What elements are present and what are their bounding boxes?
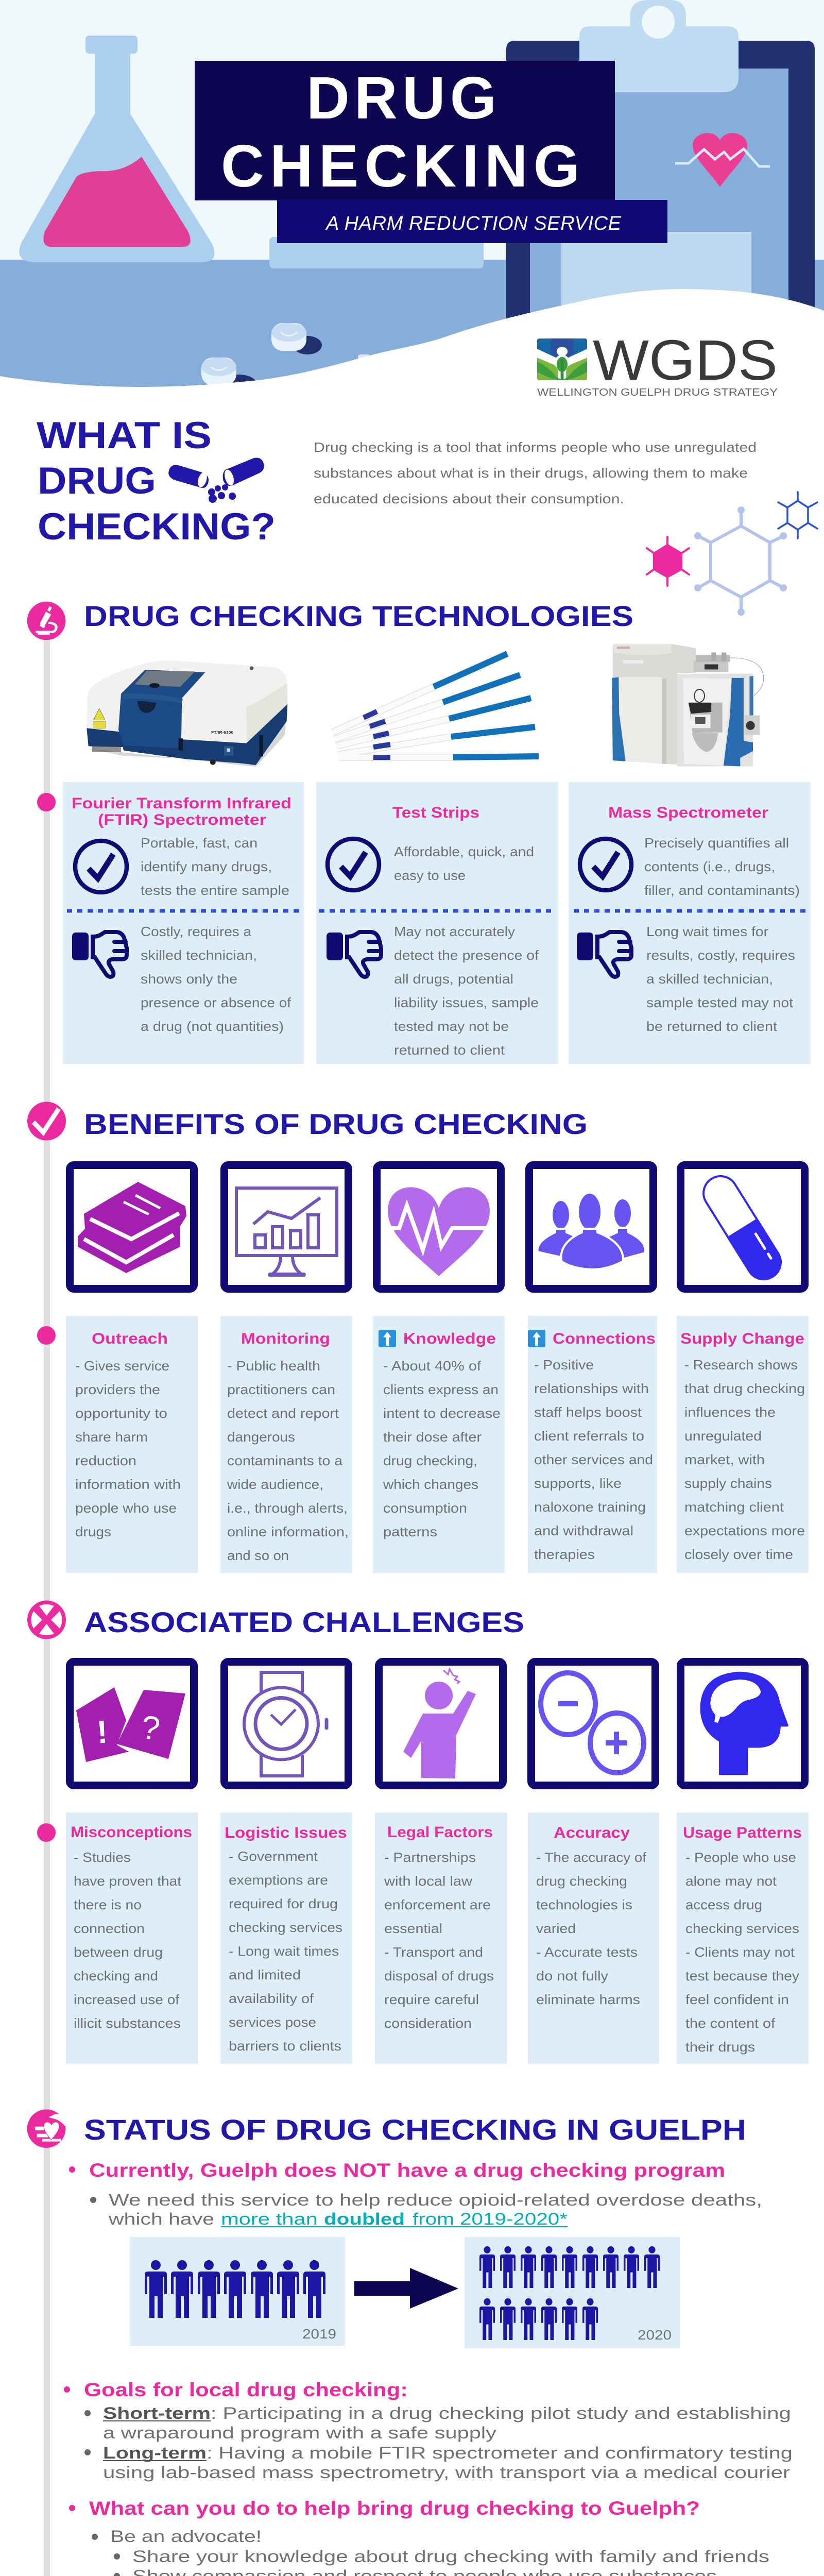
icon frame: misconceptions [70, 1662, 194, 1786]
pictogram: deaths 2019 [130, 2237, 345, 2346]
icon: microscope [27, 602, 65, 640]
text block: how to help [69, 2498, 778, 2576]
panel: usage patterns: access drug [685, 1897, 762, 1912]
panel: logistic issues: - Government [229, 1849, 318, 1864]
panel: misconceptions: between drug [74, 1944, 163, 1960]
panel: logistic issues: required for drug [229, 1896, 338, 1911]
intro paragraph [314, 439, 757, 506]
text block: goals: Long-term [103, 2444, 207, 2462]
panel: connections: supports, like [534, 1476, 622, 1491]
title banner: DRUG [306, 64, 496, 131]
pictogram: deaths 2020: 2020 [638, 2327, 672, 2343]
text block: current status: more than [221, 2210, 318, 2228]
panel: supply change: unregulated [684, 1428, 762, 1444]
section heading: benefits [27, 1101, 588, 1141]
panel: knowledge [373, 1316, 505, 1573]
text block: how to help: What can you do to help bring drug checking to Guelph? [89, 2498, 700, 2519]
panel: usage patterns: alone may not [685, 1873, 777, 1889]
panel: knowledge: consumption [383, 1500, 467, 1516]
panel: supply change [677, 1316, 809, 1573]
panel: outreach: reduction [75, 1453, 136, 1468]
marker dot [37, 1823, 56, 1842]
panel: outreach: people who use [75, 1500, 177, 1516]
panel: accuracy: - Accurate tests [536, 1944, 638, 1960]
panel: outreach: Outreach [92, 1330, 168, 1347]
panel: usage patterns: test because they [685, 1968, 799, 1984]
panel: accuracy: Accuracy [554, 1824, 630, 1841]
panel: monitoring: wide audience, [227, 1477, 323, 1492]
panel: mass spectrometer: filler, and contaminants) [644, 883, 800, 898]
panel: connections: naloxone training [534, 1499, 646, 1515]
panel: FTIR spectrometer: a drug (not quantities) [141, 1019, 284, 1034]
panel: knowledge: drug checking, [383, 1453, 477, 1468]
icon: bottle base [269, 237, 484, 268]
text block: goals: a wraparound program with a safe supply [103, 2424, 496, 2442]
panel: monitoring: contaminants to a [227, 1453, 343, 1468]
panel: supply change: influences the [684, 1404, 776, 1420]
marker dot [37, 793, 56, 811]
panel: outreach: information with [75, 1477, 181, 1492]
section heading: status in Guelph [27, 2109, 746, 2148]
panel: outreach: opportunity to [75, 1405, 167, 1421]
panel: logistic issues: barriers to clients [229, 2038, 341, 2054]
panel: supply change: supply chains [684, 1476, 772, 1491]
panel: logistic issues: checking services [229, 1920, 342, 1935]
panel: mass spectrometer: Mass Spectrometer [608, 804, 768, 821]
text block: current status: which have [108, 2210, 214, 2228]
panel: mass spectrometer: results, costly, requires [646, 947, 795, 963]
panel: FTIR spectrometer: tests the entire sample [141, 883, 289, 898]
text block: goals: : Having a mobile FTIR spectrometer and confirmatory testing [207, 2444, 793, 2462]
panel: test strips: all drugs, potential [394, 971, 513, 987]
panel: monitoring: - Public health [227, 1358, 320, 1374]
hero illustration [0, 0, 824, 417]
text block: how to help: Share your knowledge about drug checking with family and friends [132, 2547, 769, 2566]
panel: logistic issues: exemptions are [229, 1872, 328, 1888]
heading: what is drug checking: DRUG [38, 460, 156, 502]
panel: FTIR spectrometer: Costly, requires a [141, 924, 252, 939]
logo: WGDS: WGDS [593, 329, 778, 392]
panel: test strips: May not accurately [394, 924, 515, 939]
panel: test strips: tested may not be [394, 1019, 509, 1034]
panel: logistic issues: availability of [229, 1991, 314, 2006]
arrow [354, 2268, 458, 2309]
icon frame: heart [377, 1165, 501, 1289]
title banner: CHECKING [221, 132, 580, 199]
text block: current status [69, 2160, 762, 2228]
white wave [0, 289, 824, 417]
panel: knowledge: Knowledge [403, 1330, 496, 1347]
pictogram: deaths 2019: 2019 [302, 2326, 336, 2342]
panel: legal factors: with local law [384, 1873, 472, 1889]
logo: WGDS [537, 329, 778, 398]
icon frame: legal factors [379, 1662, 503, 1786]
panel: supply change: matching client [684, 1499, 784, 1515]
panel: accuracy: do not fully [536, 1968, 608, 1984]
panel: supply change: Supply Change [680, 1330, 804, 1347]
icon frame: capsule [681, 1165, 804, 1289]
panel: logistic issues [220, 1812, 352, 2064]
panel: logistic issues: services pose [229, 2014, 316, 2030]
text block: current status: We need this service to help reduce opioid-related overdose deaths, [109, 2191, 762, 2209]
text block: goals [64, 2379, 793, 2482]
logo: WGDS: WELLINGTON GUELPH DRUG STRATEGY [537, 387, 778, 398]
panel: misconceptions: connection [74, 1921, 145, 1936]
panel: FTIR spectrometer: shows only the [141, 971, 237, 987]
icon: molecules [647, 492, 817, 614]
panel: supply change: market, with [684, 1452, 765, 1467]
panel: connections: - Positive [534, 1357, 594, 1372]
panel: outreach [66, 1316, 198, 1573]
panel: misconceptions: Misconceptions [71, 1824, 192, 1841]
image: FTIR spectrometer [87, 660, 287, 767]
panel: test strips: returned to client [394, 1042, 505, 1058]
panel: knowledge: intent to decrease [383, 1405, 501, 1421]
panel: misconceptions [66, 1812, 198, 2064]
panel: mass spectrometer [569, 782, 811, 1064]
text block: current status: Currently, Guelph does NOT have a drug checking program [89, 2160, 725, 2181]
heading: what is drug checking [37, 415, 276, 548]
panel: usage patterns: their drugs [685, 2039, 755, 2055]
panel: outreach: drugs [75, 1524, 111, 1539]
panel: usage patterns: the content of [685, 2015, 776, 2031]
text block: goals: Short-term [103, 2404, 211, 2422]
panel: accuracy [528, 1812, 659, 2064]
panel: misconceptions: there is no [74, 1897, 142, 1912]
panel: monitoring: and so on [227, 1548, 289, 1563]
heading: what is drug checking: WHAT IS [37, 415, 212, 456]
panel: accuracy: - The accuracy of [536, 1850, 647, 1865]
panel: FTIR spectrometer: presence or absence of [141, 995, 291, 1010]
icon: heart in hand [27, 2109, 65, 2148]
pictogram: deaths 2020 [465, 2237, 680, 2348]
panel: usage patterns: Usage Patterns [683, 1824, 802, 1841]
icon: check badge [27, 1101, 66, 1141]
panel: misconceptions: - Studies [74, 1850, 131, 1865]
panel: accuracy: drug checking [536, 1873, 627, 1889]
panel: usage patterns: - Clients may not [685, 1944, 795, 1960]
icon frame: people [529, 1165, 653, 1289]
panel: connections: staff helps boost [534, 1404, 642, 1420]
panel: misconceptions: have proven that [74, 1873, 182, 1889]
panel: mass spectrometer: Precisely quantifies all [644, 835, 789, 851]
panel: supply change: expectations more [684, 1523, 805, 1538]
panel: supply change: closely over time [684, 1547, 793, 1562]
panel: connections: client referrals to [534, 1428, 644, 1444]
icon frame: head [681, 1662, 804, 1786]
timeline line [44, 639, 50, 2576]
panel: monitoring: online information, [227, 1524, 349, 1539]
panel: legal factors: - Transport and [384, 1944, 483, 1960]
panel: logistic issues: Logistic Issues [225, 1824, 347, 1841]
panel: misconceptions: increased use of [74, 1992, 180, 2007]
panel: connections: and withdrawal [534, 1523, 633, 1538]
panel: connections [528, 1316, 657, 1573]
icon frame: books [70, 1165, 194, 1289]
panel: misconceptions: checking and [74, 1968, 158, 1984]
icon: clipboard [506, 0, 815, 376]
panel: legal factors: disposal of drugs [384, 1968, 494, 1984]
panel: knowledge: - About 40% of [383, 1358, 482, 1374]
panel: logistic issues: and limited [229, 1967, 301, 1982]
panel: test strips: detect the presence of [394, 947, 539, 963]
section heading: status in Guelph: STATUS OF DRUG CHECKING IN GUELPH [84, 2113, 746, 2146]
panel: legal factors: consideration [384, 2015, 472, 2031]
panel: legal factors: enforcement are [384, 1897, 491, 1912]
intro paragraph: substances about what is in their drugs, allowing them to make [314, 465, 748, 481]
text block: goals: using lab-based mass spectrometry, with transport via a medical courier [103, 2463, 790, 2482]
panel: outreach: providers the [75, 1382, 160, 1397]
intro paragraph: Drug checking is a tool that informs people who use unregulated [314, 439, 757, 455]
panel: usage patterns [677, 1812, 809, 2064]
image: mass spectrometer [612, 644, 764, 767]
panel: supply change: - Research shows [684, 1357, 798, 1372]
panel: legal factors: require careful [384, 1992, 479, 2007]
icon: heartbeat heart [675, 133, 770, 187]
panel: knowledge: which changes [383, 1477, 478, 1492]
panel: accuracy: eliminate harms [536, 1992, 640, 2007]
title banner [195, 61, 615, 200]
panel: knowledge: clients express an [383, 1382, 499, 1397]
panel: monitoring: dangerous [227, 1429, 295, 1445]
panel: mass spectrometer: Long wait times for [646, 924, 768, 939]
panel: monitoring: i.e., through alerts, [227, 1500, 348, 1516]
panel: monitoring: practitioners can [227, 1382, 335, 1397]
panel: usage patterns: checking services [685, 1921, 799, 1936]
panel: monitoring: Monitoring [241, 1330, 330, 1347]
panel: usage patterns: - People who use [685, 1850, 796, 1865]
icon: opening capsule [168, 457, 264, 503]
panel: accuracy: technologies is [536, 1897, 632, 1912]
panel: supply change: that drug checking [684, 1381, 805, 1396]
panel: FTIR spectrometer: skilled technician, [141, 947, 257, 963]
panel: knowledge: patterns [383, 1524, 437, 1539]
panel: usage patterns: feel confident in [685, 1992, 789, 2007]
panel: connections: relationships with [534, 1381, 649, 1396]
panel: mass spectrometer: be returned to client [646, 1019, 778, 1034]
panel: mass spectrometer: contents (i.e., drugs, [644, 859, 775, 874]
section heading: technologies [27, 600, 633, 640]
panel: monitoring [220, 1316, 352, 1573]
panel: test strips: liability issues, sample [394, 995, 539, 1010]
icon: flask [19, 36, 215, 262]
icon: cross badge [27, 1600, 66, 1639]
section heading: technologies: DRUG CHECKING TECHNOLOGIES [84, 600, 633, 632]
panel: test strips [316, 782, 558, 1064]
panel: FTIR spectrometer [63, 782, 304, 1064]
text block: how to help: Be an advocate! [110, 2527, 262, 2546]
panel: knowledge: their dose after [383, 1429, 482, 1445]
icon frame: accuracy [531, 1662, 655, 1786]
intro paragraph: educated decisions about their consumption. [314, 491, 624, 506]
text block: current status: from 2019-2020* [413, 2210, 568, 2228]
panel: connections: other services and [534, 1452, 653, 1467]
panel: outreach: share harm [75, 1429, 148, 1445]
panel: mass spectrometer: a skilled technician, [646, 971, 773, 987]
panel: legal factors [375, 1812, 507, 2064]
text block: current status: doubled [324, 2210, 405, 2228]
icon frame: misconceptions: ? [139, 1708, 162, 1748]
panel: FTIR spectrometer: identify many drugs, [141, 859, 272, 874]
text block: goals: Goals for local drug checking: [84, 2379, 408, 2400]
panel: test strips: easy to use [394, 868, 466, 883]
panel: accuracy: varied [536, 1921, 576, 1936]
panel: outreach: - Gives service [75, 1358, 169, 1374]
panel: logistic issues: - Long wait times [229, 1943, 339, 1959]
section heading: benefits: BENEFITS OF DRUG CHECKING [84, 1108, 588, 1140]
icon frame: monitoring chart [225, 1165, 348, 1289]
section heading: challenges [27, 1600, 524, 1639]
panel: mass spectrometer: sample tested may not [646, 995, 794, 1010]
panel: connections: therapies [534, 1547, 595, 1562]
panel: test strips: Test Strips [392, 804, 479, 821]
text block: goals: : Participating in a drug checking pilot study and establishing [211, 2404, 791, 2422]
subtitle banner [277, 200, 667, 243]
subtitle banner: A HARM REDUCTION SERVICE [325, 213, 622, 234]
heading: what is drug checking: CHECKING? [38, 506, 276, 548]
panel: legal factors: essential [384, 1921, 442, 1936]
image: FTIR spectrometer: FT/IR-6300 [211, 730, 233, 735]
icon frame: misconceptions: ! [96, 1714, 109, 1751]
icon: pills on table [201, 323, 370, 393]
section heading: challenges: ASSOCIATED CHALLENGES [84, 1606, 524, 1638]
panel: FTIR spectrometer: (FTIR) Spectrometer [98, 811, 266, 828]
panel: misconceptions: illicit substances [74, 2015, 181, 2031]
panel: FTIR spectrometer: Fourier Transform Infrared [72, 795, 291, 812]
panel: legal factors: - Partnerships [384, 1850, 476, 1865]
panel: test strips: Affordable, quick, and [394, 844, 534, 859]
panel: FTIR spectrometer: Portable, fast, can [141, 835, 258, 851]
marker dot [37, 1326, 56, 1345]
panel: monitoring: detect and report [227, 1405, 339, 1421]
panel: legal factors: Legal Factors [387, 1824, 493, 1841]
panel: connections: Connections [553, 1330, 656, 1347]
image: test strips [332, 654, 539, 757]
icon frame: watch [225, 1662, 348, 1786]
